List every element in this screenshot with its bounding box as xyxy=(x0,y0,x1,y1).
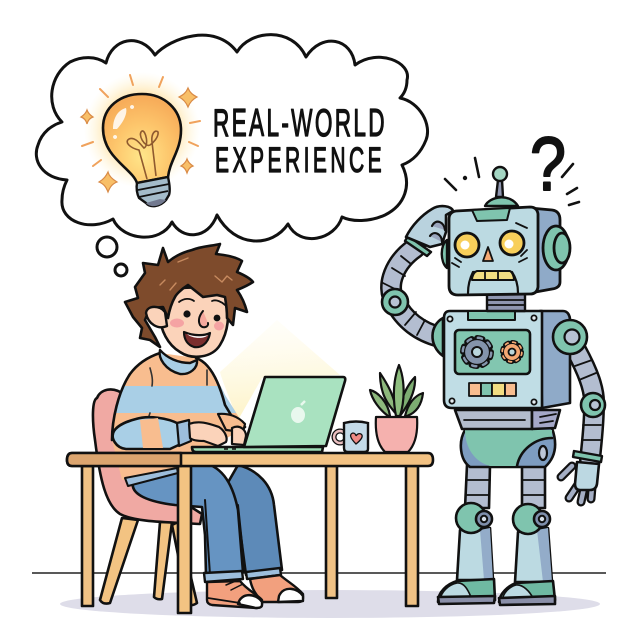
bulb screw base xyxy=(137,177,170,206)
laptop screen xyxy=(244,377,345,447)
thought cloud with bulb and caption xyxy=(36,35,428,241)
desk legs xyxy=(82,466,418,606)
screen panel xyxy=(455,330,530,374)
robot left shoulder xyxy=(432,318,443,356)
plant xyxy=(370,365,423,452)
chair legs xyxy=(100,518,197,605)
desk xyxy=(67,453,433,613)
eyebrows xyxy=(179,299,225,305)
robot elbow right xyxy=(581,393,605,417)
desk top xyxy=(67,453,433,466)
bulb glass xyxy=(103,94,181,183)
robot fingers xyxy=(430,222,445,242)
floor shadow xyxy=(60,590,600,618)
near sleeve stripes xyxy=(140,418,163,448)
laptop ports xyxy=(224,448,236,450)
fingers xyxy=(561,466,592,502)
head front xyxy=(449,207,538,295)
robot wrist band xyxy=(573,451,602,462)
bulb glow xyxy=(84,72,200,188)
person xyxy=(100,244,303,608)
robot raised arm xyxy=(383,248,440,337)
sweater hem xyxy=(125,468,178,486)
robot right arm xyxy=(575,350,601,460)
light rays xyxy=(82,75,200,166)
caption xyxy=(213,101,387,180)
bulb highlights xyxy=(113,105,134,139)
caption: EXPERIENCE xyxy=(215,142,385,180)
right ear xyxy=(543,226,569,270)
head xyxy=(125,244,253,357)
gear grey xyxy=(463,338,491,366)
gear orange xyxy=(502,342,522,362)
sleeve cuff xyxy=(177,420,191,446)
filament xyxy=(127,131,158,179)
icon: light bulb xyxy=(81,72,200,206)
robot shins xyxy=(457,528,552,582)
torso side xyxy=(540,311,570,408)
nose xyxy=(483,247,493,261)
forehead plate xyxy=(472,208,510,221)
palm xyxy=(575,462,599,490)
sweater collar xyxy=(160,350,197,374)
hair xyxy=(125,244,253,347)
desk top shaded end xyxy=(67,453,181,466)
cloud outline xyxy=(36,35,428,241)
hair highlights xyxy=(160,258,232,290)
sweater torso xyxy=(110,352,246,480)
robot legs xyxy=(465,465,545,508)
caption: REAL-WORLD xyxy=(213,101,387,145)
robot knees xyxy=(456,503,550,534)
torso front xyxy=(444,311,542,408)
robot raised hand xyxy=(406,206,453,247)
face xyxy=(160,288,228,357)
robot left ear xyxy=(442,240,447,268)
eyes xyxy=(455,231,524,257)
thought bubbles xyxy=(97,237,127,276)
mug xyxy=(334,422,368,452)
laptop light cone xyxy=(220,320,340,420)
question mark: ? xyxy=(530,121,566,206)
mug heart xyxy=(351,433,362,444)
chair seat and back xyxy=(93,389,202,524)
near hand xyxy=(189,422,227,446)
chair xyxy=(93,389,202,605)
nose xyxy=(199,311,208,327)
robot antenna xyxy=(485,167,518,206)
robot head xyxy=(449,207,570,295)
brow and worry lines xyxy=(452,223,527,267)
mouth xyxy=(468,272,518,293)
confusion lines xyxy=(445,158,579,205)
mouth xyxy=(184,332,210,347)
robot feet xyxy=(438,579,555,605)
robot raised wrist band xyxy=(405,236,431,256)
laptop logo xyxy=(291,407,305,423)
near sleeve xyxy=(113,417,183,449)
pot xyxy=(376,417,417,452)
robot torso xyxy=(444,311,570,408)
far hand xyxy=(232,427,246,445)
robot right hand xyxy=(561,462,599,502)
sparkles xyxy=(81,88,197,192)
status buttons xyxy=(469,383,516,396)
confusion dot xyxy=(463,176,467,180)
robot xyxy=(382,121,605,605)
leaves xyxy=(380,373,398,416)
robot right shoulder xyxy=(553,320,587,354)
robot pelvis xyxy=(461,428,555,467)
torso top plate xyxy=(468,311,515,320)
eyes xyxy=(183,310,191,318)
robot elbow left xyxy=(382,289,408,315)
jeans cuffs xyxy=(204,568,281,582)
jeans xyxy=(133,462,282,575)
front shoe xyxy=(207,580,262,608)
head side xyxy=(530,208,560,293)
robot waist xyxy=(455,410,560,429)
far sleeve xyxy=(218,414,245,432)
laptop base xyxy=(192,447,323,452)
robot neck xyxy=(487,293,525,311)
back shoe xyxy=(250,575,303,602)
floor line xyxy=(32,572,606,574)
laptop xyxy=(192,377,345,452)
cheeks xyxy=(170,318,184,328)
ear xyxy=(146,307,167,327)
screws xyxy=(447,315,537,405)
